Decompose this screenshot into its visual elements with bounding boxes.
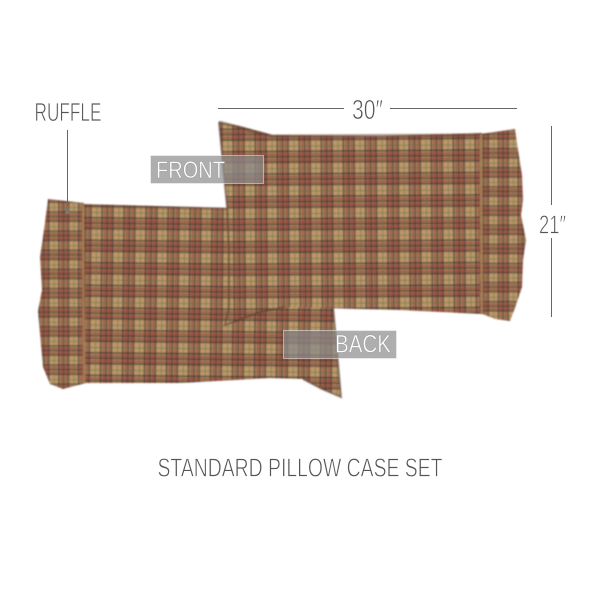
back pillow: [38, 199, 341, 397]
height dimension: 21 inches: 21″: [539, 210, 566, 240]
front pillow: [219, 122, 526, 325]
label: front: FRONT: [156, 157, 225, 184]
back pillow body: [83, 204, 341, 397]
ruffle label: RUFFLE: [34, 97, 102, 127]
back pillow ruffle: [38, 199, 86, 389]
caption: STANDARD PILLOW CASE SET: [158, 452, 443, 482]
label: back: [284, 330, 396, 358]
ruffle arrow: [65, 130, 70, 214]
label: front: [150, 156, 264, 184]
width dimension: 30 inches: 30″: [352, 94, 383, 125]
front pillow body: [219, 122, 482, 325]
label: back: BACK: [335, 330, 391, 358]
front pillow ruffle: [480, 129, 526, 321]
